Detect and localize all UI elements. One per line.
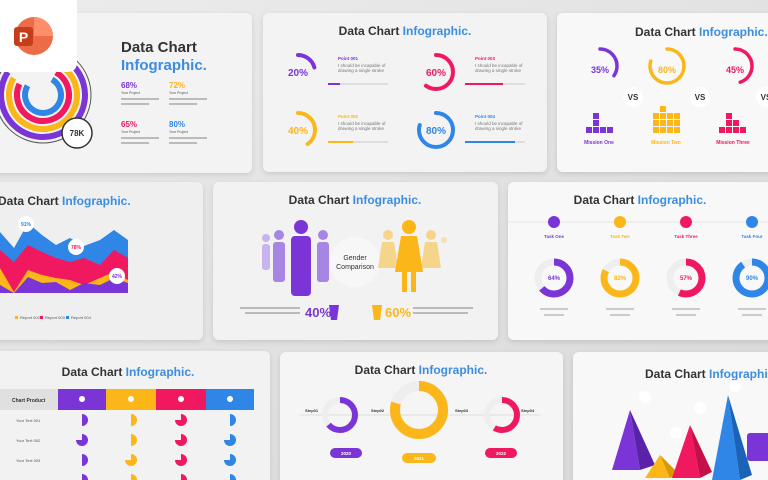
panel: area chart	[0, 182, 203, 340]
table: Your Text 002	[16, 438, 41, 443]
point texts: Point 004	[475, 114, 496, 119]
point texts: drawing a single stroke	[475, 68, 522, 73]
legend	[15, 315, 92, 320]
circles	[583, 49, 752, 83]
panel: mission comparison: Mission Three	[716, 140, 750, 146]
circles	[281, 55, 453, 147]
point texts: Point 002	[338, 114, 359, 119]
stats: 80%	[169, 120, 185, 129]
icon box	[747, 433, 768, 461]
heading: title	[121, 39, 207, 74]
table: Your Text 003	[16, 458, 41, 463]
steps	[300, 386, 540, 463]
table	[0, 389, 254, 480]
panel: mission comparison: 45%	[726, 65, 744, 75]
heading: Data Chart Infographic.	[355, 363, 487, 377]
panel: task donuts	[508, 182, 768, 340]
area chart	[0, 223, 128, 293]
block charts	[586, 106, 746, 133]
icon: female figures	[378, 220, 447, 292]
panel: four progress circles: 60%	[426, 68, 446, 79]
vs badges: VS	[628, 93, 639, 102]
legend: Report 002	[20, 315, 41, 320]
steps: Step02	[371, 408, 385, 413]
stats: Your Project	[169, 130, 188, 134]
panel: table chart	[0, 351, 270, 480]
vs badges	[623, 87, 768, 107]
stats: 68%	[121, 81, 137, 90]
heading: title: Infographic.	[121, 57, 207, 74]
point texts: drawing a single stroke	[338, 68, 385, 73]
panel: radial chart slide	[0, 13, 252, 173]
point texts: Point 003	[475, 56, 496, 61]
heading: Data Chart Infographic.	[339, 24, 471, 38]
panel: mission comparison: Mission One	[584, 140, 614, 146]
panel: area chart: 91%	[21, 222, 32, 228]
panel: four progress circles: 20%	[288, 68, 308, 79]
steps: Step03	[455, 408, 469, 413]
heading: Data Chart Infographic.	[635, 25, 768, 39]
stats: Your Project	[121, 91, 140, 95]
panel: four progress circles: 80%	[426, 126, 446, 137]
steps: 2020	[341, 451, 352, 456]
stats: 72%	[169, 81, 185, 90]
point texts: drawing a single stroke	[475, 126, 522, 131]
panel: four progress circles	[263, 13, 547, 172]
radial chart	[0, 38, 100, 152]
stats	[240, 305, 473, 320]
panel: area chart: 78%	[71, 245, 82, 251]
stats: 60%	[385, 305, 411, 320]
callout: gender comparison: Comparison	[336, 264, 374, 271]
panel: four progress circles: 40%	[288, 126, 308, 137]
pyramids	[612, 395, 752, 480]
heading: Data Chart Infographic.	[574, 193, 706, 207]
task columns: Task Three	[674, 234, 698, 239]
panel: gender comparison	[213, 182, 498, 340]
panel: area chart: 42%	[112, 274, 123, 280]
heading: Data Chart Infographic.	[62, 365, 194, 379]
steps: Step01	[305, 408, 319, 413]
point texts: Point 001	[338, 56, 359, 61]
steps: Step04	[521, 408, 535, 413]
panel: mission comparison: 80%	[658, 65, 676, 75]
point texts: drawing a single stroke	[338, 126, 385, 131]
panel: mission comparison: 35%	[591, 65, 609, 75]
stats: Your Project	[121, 130, 140, 134]
task columns	[544, 216, 763, 239]
task columns: Task Four	[741, 234, 763, 239]
panel: pyramid chart	[573, 352, 768, 480]
point texts	[338, 56, 523, 131]
legend: Report 003	[45, 315, 66, 320]
callout: gender comparison: Gender	[343, 255, 367, 262]
panel: task donuts: 64%	[548, 276, 561, 282]
heading: title: Data Chart	[121, 39, 197, 56]
steps: 2021	[414, 456, 425, 461]
panel: timeline donuts	[280, 352, 563, 480]
panel: mission comparison	[557, 13, 768, 172]
icon: PowerPoint badge	[0, 0, 77, 72]
point texts: I should be incapable of	[475, 63, 523, 68]
heading: Data Chart Infographic.	[289, 193, 421, 207]
stats: 40%	[305, 305, 331, 320]
point texts: I should be incapable of	[338, 63, 386, 68]
task columns: Task One	[544, 234, 564, 239]
panel: task donuts: 57%	[680, 276, 693, 282]
point texts: I should be incapable of	[475, 121, 523, 126]
point texts: I should be incapable of	[338, 121, 386, 126]
legend: Report 004	[71, 315, 92, 320]
icon: male figures	[262, 220, 329, 296]
table: Chart Product	[12, 398, 46, 404]
icon: PowerPoint badge: P	[19, 29, 28, 45]
panel: task donuts: 90%	[746, 276, 759, 282]
task columns: Task Two	[610, 234, 630, 239]
panel: mission comparison: Mission Two	[651, 140, 681, 146]
badge: 78K: 78K	[70, 129, 85, 138]
callout: gender comparison	[330, 237, 380, 287]
panel: task donuts: 82%	[614, 276, 627, 282]
stats: 65%	[121, 120, 137, 129]
badge: 78K	[62, 118, 92, 148]
table: Your Text 001	[16, 418, 41, 423]
vs badges: VS	[695, 93, 706, 102]
stats: Your Project	[169, 91, 188, 95]
stats	[121, 81, 207, 144]
steps: 2022	[496, 451, 507, 456]
heading: Data Chart Infographic.	[0, 194, 131, 208]
